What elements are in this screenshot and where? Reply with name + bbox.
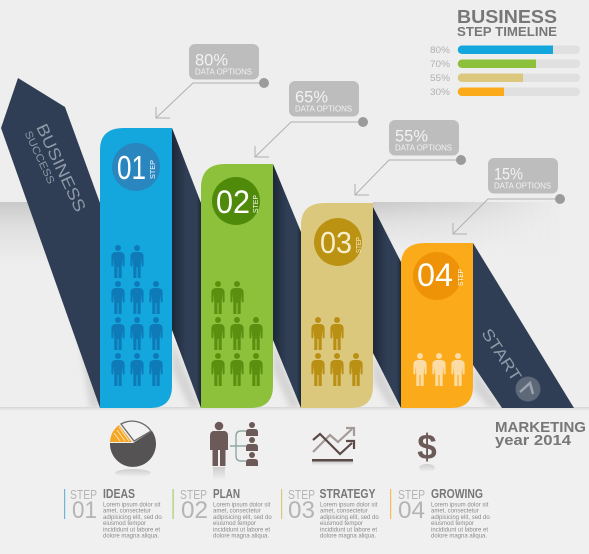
icon: dollar: $ [417,428,437,467]
people: 3 icons [413,353,465,386]
ribbon label: success: SUCCESS [22,129,57,186]
step 02: plan: amet, consectetur [213,509,261,515]
icon: manager and team [210,422,258,480]
step 01: ideas: STEP [70,488,97,502]
badge 01: STEP [148,160,157,179]
card: step 02 [201,164,273,408]
step 04: growing: Lorem ipsum dolor sit [431,502,489,508]
step 04: growing: dolore magna aliqua. [431,534,487,540]
step 01: ideas: eiusmod tempor [103,521,146,527]
bar chart: timeline: 80% [430,45,450,55]
bar chart: timeline [430,45,580,97]
step 02: plan: PLAN [213,487,240,501]
step 04: growing: STEP [398,488,425,502]
badge 01 [112,143,160,191]
bar chart: timeline: 55% [430,73,450,83]
step 02: plan: incididunt ut labore et [213,527,270,533]
card: step 03 [301,203,373,408]
callout: 65%: 65% [295,88,328,106]
people: 11 icons [111,245,163,386]
step 04: growing: GROWING [431,487,483,501]
step 03: strategy: STRATEGY [320,487,376,501]
step 01: ideas: Lorem ipsum dolor sit [103,502,161,508]
start circle icon [516,376,540,402]
step 02: plan: STEP [180,488,207,502]
badge 01: 01 [117,149,146,186]
callout: 55%: DATA OPTIONS [395,144,452,152]
background [0,202,589,410]
callout: 80%: 80% [195,50,228,70]
ribbon: start [473,243,574,408]
step 02: plan: 02 [181,497,208,524]
step 03: strategy: amet, consectetur [320,509,368,515]
title: business step timeline: BUSINESS [457,6,557,27]
title: business step timeline: STEP TIMELINE [457,25,557,39]
step 02: plan: eiusmod tempor [213,521,256,527]
ribbon between step 2 and 3 [273,164,301,408]
heading: marketing year 2014: year 2014 [495,432,572,449]
step 04: growing: incididunt ut labore et [431,527,488,533]
step 03: strategy: dolore magna aliqua. [320,534,376,540]
step 03: strategy: Lorem ipsum dolor sit [320,502,378,508]
step 04: growing: amet, consectetur [431,509,479,515]
badge 03: 03 [320,225,352,260]
icon: pie chart [110,421,156,477]
step 04: growing: eiusmod tempor [431,521,474,527]
step 03: strategy: 03 [288,497,315,524]
badge 04: STEP [456,269,465,286]
ribbon between step 3 and 4 [373,207,401,408]
badge 02: STEP [251,195,260,213]
ribbon arrow: business success [1,78,100,408]
step 03: strategy: STEP [288,488,315,502]
step 02: plan: dolore magna aliqua. [213,534,269,540]
badge 02 [212,177,260,225]
badge 02: 02 [216,184,250,220]
step 01: ideas: 01 [72,497,97,524]
step 04: growing: adipisicing elit, sed do [431,515,490,521]
step 01: ideas: dolore magna aliqua. [103,534,159,540]
step 02: plan: adipisicing elit, sed do [213,515,272,521]
bar chart: timeline: 70% [430,59,450,69]
card: step 04 [401,243,473,408]
step 01: ideas [64,487,162,540]
people: 8 icons [211,281,263,386]
badge 04 [413,252,465,300]
card: step 01 [100,128,172,408]
icon: strategy arrows [312,428,354,466]
callout: 65% [255,81,368,157]
step 01: ideas: amet, consectetur [103,509,151,515]
badge 04: 04 [417,257,453,293]
step 03: strategy: incididunt ut labore et [320,527,377,533]
badge 03: STEP [356,237,363,253]
callout: 80% [156,44,269,118]
ribbon between step 1 and 2 [172,128,201,408]
step 01: ideas: IDEAS [103,487,135,501]
ribbon label: business: BUSINESS [32,121,89,215]
bar chart: timeline: 30% [430,87,450,97]
callout: 15%: DATA OPTIONS [494,182,551,190]
step 02: plan [172,487,272,540]
step 01: ideas: incididunt ut labore et [103,527,160,533]
badge 03 [314,218,363,266]
callout: 55%: 55% [395,126,428,146]
people: 5 icons [311,317,363,386]
step 04: growing [390,487,490,540]
step 03: strategy: adipisicing elit, sed do [320,515,379,521]
title: business step timeline [457,6,557,39]
callout: 80%: DATA OPTIONS [195,68,252,76]
step 03: strategy: eiusmod tempor [320,521,363,527]
callout: 15%: 15% [494,164,523,184]
callout: 65%: DATA OPTIONS [295,104,352,114]
callout: 15% [453,158,565,234]
heading: marketing year 2014: MARKETING [495,419,586,436]
step 04: growing: 04 [398,497,425,524]
start label: START [478,326,524,385]
heading: marketing year 2014 [495,419,586,449]
callout: 55% [355,120,466,195]
step 03: strategy [281,487,379,540]
step 02: plan: Lorem ipsum dolor sit [213,502,271,508]
step 01: ideas: adipisicing elit, sed do [103,515,162,521]
